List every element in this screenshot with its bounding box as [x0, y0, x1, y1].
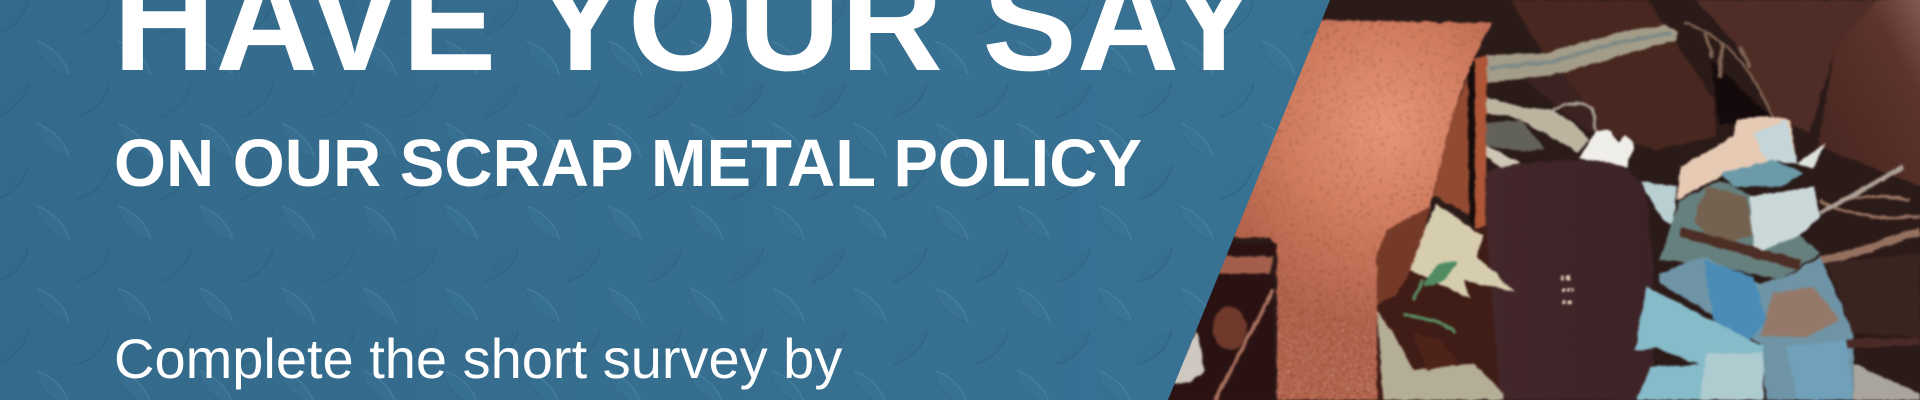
photo: upper rusty cylinders: [1510, 0, 1920, 190]
photo: torn paper and green leaf: [1377, 203, 1515, 400]
photo: roots and dark undergrowth: [1807, 167, 1920, 343]
panel: blue checker-plate background: [0, 0, 1330, 400]
photo: dark opening under beam: [1160, 243, 1277, 400]
photo: pale teal sheet: [1635, 287, 1763, 400]
photo: scrap metal pile: [1100, 0, 1920, 400]
photo: dark purple drum: [1486, 160, 1653, 400]
photo: beam rust speckle: [1250, 20, 1478, 400]
subheading: scrap metal policy: ON OUR SCRAP METAL POLICY: [114, 127, 1142, 201]
photo: torn blue and peach debris: [1635, 117, 1920, 400]
text: survey prompt: Complete the short survey by: [114, 327, 842, 390]
photo: branches: [1486, 25, 1678, 169]
photo: small twigs and grass: [1683, 22, 1777, 127]
photo: rusted beam: [1100, 20, 1500, 400]
